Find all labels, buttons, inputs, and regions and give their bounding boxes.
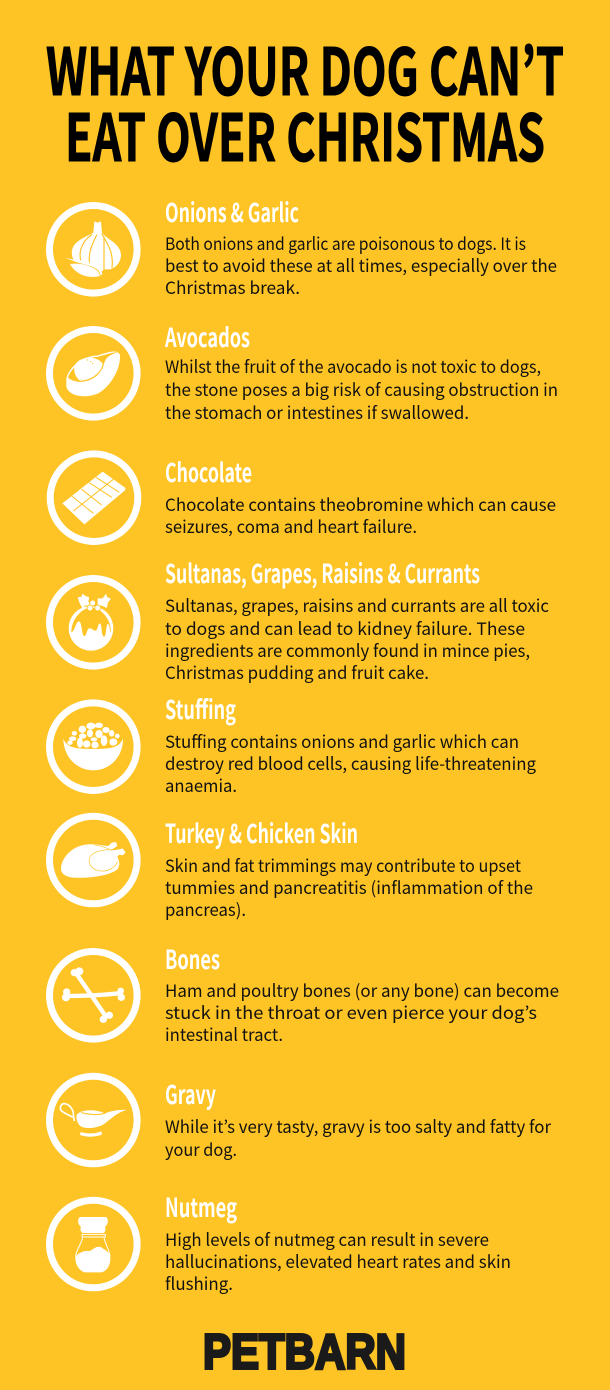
text block: Skin and fat trimmings may contribute to upset (165, 852, 521, 877)
icon: nutmeg jar (50, 1200, 137, 1288)
text block (165, 230, 557, 299)
title (46, 20, 564, 180)
text block: Stuffing contains onions and garlic which can (165, 728, 519, 753)
icon: christmas pudding (50, 578, 137, 666)
text block: anaemia. (165, 772, 237, 797)
logo: Petbarn: PETBARN (203, 1326, 406, 1380)
text block: hallucinations, elevated heart rates and skin (165, 1248, 511, 1273)
text block (165, 1226, 511, 1295)
text block: flushing. (165, 1270, 233, 1295)
text block (165, 852, 533, 921)
heading: Avocados (164, 318, 250, 355)
text block: intestinal tract. (165, 1021, 283, 1046)
panel: avocados (50, 318, 558, 424)
heading: Onions & Garlic (165, 193, 299, 230)
text block (165, 1113, 551, 1161)
text block (165, 592, 549, 684)
text block (165, 491, 556, 538)
text block: stuck in the throat or even pierce your dog’s (165, 999, 537, 1024)
icon: gravy boat (50, 1076, 137, 1164)
text block: Christmas break. (165, 274, 300, 299)
panel: sultanas, grapes, raisins and currants (50, 554, 549, 684)
heading: Gravy (165, 1075, 216, 1112)
text block (165, 353, 558, 424)
text block: ingredients are commonly found in mince pies, (165, 637, 530, 662)
text block: Chocolate contains theobromine which can cause (165, 491, 556, 516)
text block: destroy red blood cells, causing life-threatening (165, 750, 536, 775)
icon: crossed bones (50, 952, 137, 1039)
text block: the stomach or intestines if swallowed. (165, 399, 469, 424)
panel: chocolate (50, 453, 556, 542)
text block: High levels of nutmeg can result in severe (165, 1226, 489, 1251)
heading: Nutmeg (165, 1188, 237, 1225)
text block (165, 977, 559, 1046)
text block: Sultanas, grapes, raisins and currants are all toxic (165, 592, 549, 617)
heading: Chocolate (165, 453, 252, 490)
text block: the stone poses a big risk of causing obstruction in (165, 376, 558, 401)
text block: your dog. (165, 1136, 237, 1161)
panel: bones (50, 940, 559, 1046)
text block: Christmas pudding and fruit cake. (165, 659, 429, 684)
heading: Turkey & Chicken Skin (165, 814, 358, 851)
icon: roast turkey (50, 816, 137, 904)
panel: nutmeg (50, 1188, 511, 1295)
text block: While it’s very tasty, gravy is too salty and fatty for (165, 1113, 551, 1138)
heading: Stuffing (165, 690, 236, 727)
text block: best to avoid these at all times, especially over the (165, 252, 557, 277)
panel: onions and garlic (50, 193, 557, 299)
icon: chocolate bar (50, 454, 138, 542)
text block: pancreas). (165, 896, 246, 921)
text block (165, 728, 536, 797)
icon: garlic (50, 206, 137, 293)
panel: stuffing (50, 690, 536, 797)
panel: gravy (50, 1075, 551, 1164)
text block: Whilst the fruit of the avocado is not toxic to dogs, (165, 353, 541, 378)
panel: turkey and chicken skin (50, 814, 533, 921)
icon: bowl of stuffing (50, 703, 137, 790)
text block: to dogs and can lead to kidney failure. These (165, 615, 525, 640)
text block: Both onions and garlic are poisonous to dogs. It is (165, 230, 526, 255)
text block: tummies and pancreatitis (inflammation of the (165, 874, 533, 899)
text block: Ham and poultry bones (or any bone) can become (165, 977, 559, 1002)
text block: seizures, coma and heart failure. (165, 513, 417, 538)
heading: Bones (165, 940, 220, 977)
icon: avocado (50, 330, 137, 417)
